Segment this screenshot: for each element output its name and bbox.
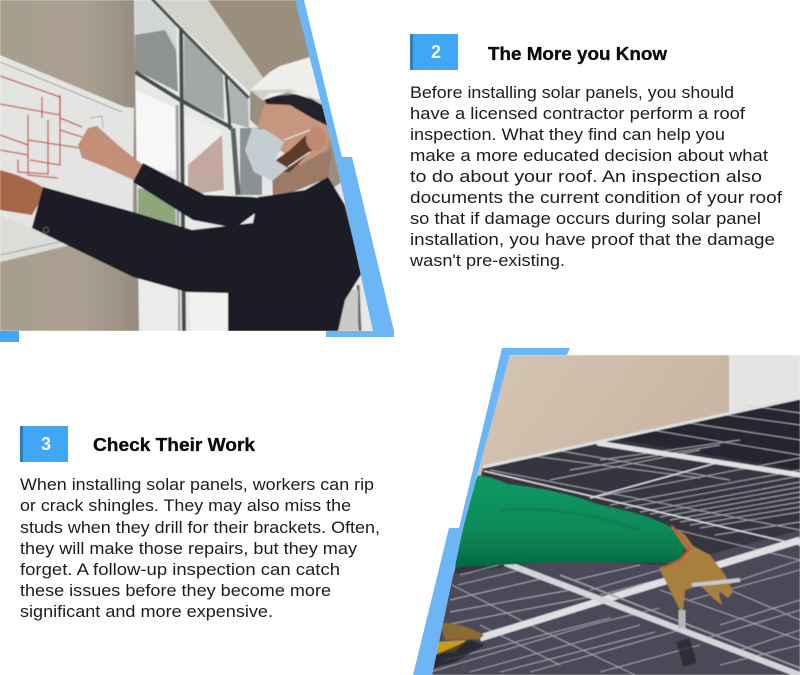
black shirt	[32, 163, 362, 331]
white panel frames	[480, 398, 800, 675]
text block: step 3 body: When installing solar panels, workers can rip	[20, 475, 374, 494]
ear	[306, 127, 326, 151]
bare left forearm	[0, 170, 47, 215]
text block: step 3 body: they will make those repairs, but they may	[20, 539, 358, 558]
work glove	[659, 525, 733, 610]
text block: step 3 body: significant and more expensive.	[20, 602, 273, 621]
second glove	[440, 623, 484, 640]
concrete pillar	[0, 0, 139, 331]
thin cell lines	[430, 405, 800, 675]
window frames	[135, 0, 360, 331]
neck	[272, 150, 332, 200]
text block: step 2 body: inspection. What they find can help you	[410, 125, 725, 144]
badge: step 3	[20, 426, 68, 462]
text block: step 2 body: wasn't pre-existing.	[409, 251, 565, 270]
solar panel surface	[454, 399, 800, 575]
text block: step 3 body: or crack shingles. They may also miss the	[20, 496, 351, 515]
ceiling beam	[155, 0, 265, 92]
window panes	[135, 0, 177, 57]
blue frame: lower-right diagonal	[413, 348, 570, 675]
wall behind the worker	[205, 0, 345, 190]
text block: step 2 body: to do about your roof. An inspection also	[410, 167, 762, 186]
heading: Check Their Work: Check Their Work	[93, 434, 256, 455]
pale wall at right	[729, 355, 800, 415]
text block: step 2 body: Before installing solar panels, you should	[410, 83, 734, 102]
head	[258, 102, 330, 166]
blueprint	[0, 54, 135, 233]
badge: step 2: 2	[431, 42, 441, 62]
text block: step 3 body	[20, 475, 380, 621]
hand on blueprint	[78, 126, 143, 180]
photo: gloved worker installing solar panels	[425, 355, 800, 675]
text block: step 3 body: these issues before they become more	[20, 581, 331, 600]
drill bit and bolt	[678, 610, 686, 628]
beige wall	[478, 355, 730, 476]
beard	[276, 135, 312, 172]
text block: step 2 body: have a licensed contractor perform a roof	[410, 104, 745, 123]
text block: step 2 body: documents the current condition of your roof	[410, 188, 782, 207]
text block: step 2 body	[409, 83, 782, 270]
text block: step 3 body: studs when they drill for their brackets. Often,	[20, 518, 380, 537]
text block: step 2 body: make a more educated decision about what	[410, 146, 768, 165]
green sleeve	[455, 475, 687, 567]
badge: step 2	[410, 34, 458, 70]
surgical mask	[245, 128, 288, 181]
blue frame: top-right diagonal	[0, 0, 394, 342]
cuff button	[43, 227, 49, 233]
text block: step 2 body: installation, you have proof that the damage	[410, 230, 775, 249]
blue bar: bottom left	[0, 331, 19, 342]
dark hair under helmet	[264, 92, 330, 127]
window background	[130, 0, 380, 331]
blue bar: bottom right	[326, 331, 394, 337]
heading: The More you Know: The More you Know	[488, 43, 668, 64]
hard hat	[250, 56, 322, 104]
photo: worker in hard hat checking blueprint	[0, 0, 380, 331]
text block: step 3 body: forget. A follow-up inspection can catch	[20, 560, 340, 579]
text block: step 2 body: so that if damage occurs during solar panel	[410, 209, 761, 228]
badge: step 3: 3	[41, 434, 51, 454]
